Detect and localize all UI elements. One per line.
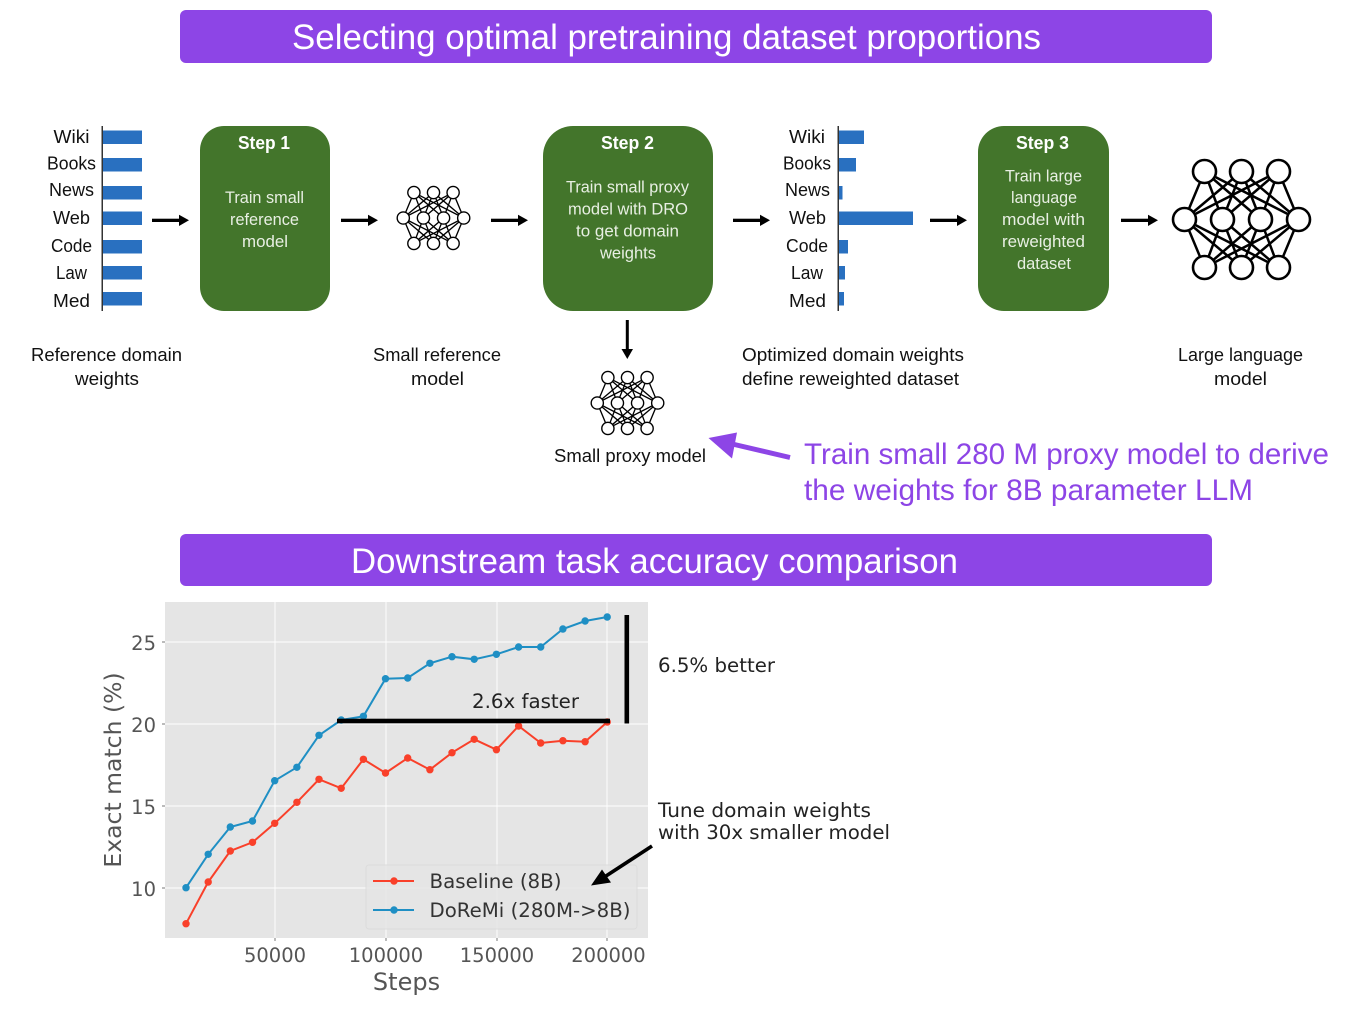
line chart: exact match vs steps [99, 602, 648, 996]
legend [366, 865, 637, 929]
y axis tick labels: 10 [131, 878, 156, 901]
title banner: selecting proportions [180, 10, 1212, 63]
arrow: small reference model to step 2 [491, 215, 528, 226]
panel: optimized domain weights bar chart [783, 126, 913, 311]
panel: step 3: dataset [1017, 255, 1071, 273]
y axis tick labels: 15 [131, 796, 156, 819]
panel: step 2: Step 2 [601, 133, 654, 153]
panel: reference domain weights bar chart [47, 126, 142, 311]
legend: Baseline (8B) [430, 870, 562, 893]
panel: step 2: model with DRO [568, 200, 688, 218]
arrow: purple callout pointer [708, 432, 790, 458]
panel: reference domain weights bar chart: Code [51, 236, 92, 256]
caption: reference domain weights: Reference domain [31, 345, 182, 365]
arrow: weights to step 1 [152, 215, 189, 226]
caption: small reference model: model [411, 369, 464, 389]
x axis tick labels: 150000 [460, 944, 534, 967]
panel: step 3: reweighted [1002, 233, 1085, 251]
annotation: 6.5% better: 6.5% better [658, 654, 776, 677]
panel: step 2: weights [599, 244, 656, 262]
panel: step 1: Step 1 [238, 133, 290, 153]
annotation: 2.6x faster: 2.6x faster [472, 690, 580, 713]
caption: large language model [1178, 345, 1303, 389]
annotation: 6.5% better [624, 615, 776, 724]
panel: step 2: to get domain [576, 222, 679, 240]
panel: reference domain weights bar chart: Books [47, 154, 96, 174]
panel: reference domain weights bar chart: Wiki [54, 127, 90, 147]
title banner: downstream accuracy: Downstream task accuracy comparison [351, 542, 958, 581]
panel: step 2 [543, 126, 713, 311]
callout: purple proxy explanation [804, 438, 1329, 507]
x axis tick labels [244, 944, 646, 967]
annotation: tune domain weights: Tune domain weights [657, 799, 871, 822]
x axis tick labels: 100000 [349, 944, 423, 967]
y axis tick labels [131, 632, 156, 901]
callout: purple proxy explanation: Train small 280 M proxy model to derive [804, 438, 1329, 471]
panel: step 3 [978, 126, 1109, 311]
series: Baseline [182, 718, 611, 927]
panel: optimized domain weights bar chart: Law [791, 263, 824, 283]
caption: large language model: Large language [1178, 345, 1303, 365]
caption: optimized domain weights: define reweighted dataset [742, 369, 959, 389]
caption: large language model: model [1214, 369, 1267, 389]
arrow: optimized weights to step 3 [930, 215, 967, 226]
title banner: selecting proportions: Selecting optimal pretraining dataset proportions [292, 18, 1041, 57]
arrow: step 3 to large model [1121, 215, 1158, 226]
arrow: step 1 to small reference model [341, 215, 378, 226]
panel: optimized domain weights bar chart: Med [789, 291, 826, 311]
caption: optimized domain weights [742, 345, 964, 389]
caption: optimized domain weights: Optimized domain weights [742, 345, 964, 365]
panel: optimized domain weights bar chart: Books [783, 154, 831, 174]
panel: optimized domain weights bar chart: Wiki [789, 127, 825, 147]
caption: small proxy model: Small proxy model [554, 446, 706, 466]
x axis tick labels: 200000 [571, 944, 646, 967]
panel: reference domain weights bar chart: Law [56, 263, 88, 283]
arrow: step 2 to optimized weights [733, 215, 770, 226]
x axis tick labels: 50000 [244, 944, 306, 967]
caption: small reference model [373, 345, 501, 389]
annotation: tune domain weights: with 30x smaller model [658, 821, 890, 844]
x axis title: Steps [373, 968, 440, 996]
icon: small reference network [397, 186, 470, 250]
title banner: downstream accuracy [180, 534, 1212, 586]
panel: step 3: model with [1002, 211, 1085, 229]
panel: optimized domain weights bar chart: Code [786, 236, 828, 256]
panel: step 1: model [242, 233, 288, 251]
icon: large language model network [1173, 160, 1310, 279]
annotation: 2.6x faster [337, 690, 610, 723]
icon: small proxy network [591, 371, 664, 435]
panel: reference domain weights bar chart: News [49, 180, 94, 200]
legend: DoReMi (280M->8B) [430, 899, 630, 922]
caption: reference domain weights: weights [74, 369, 139, 389]
panel: step 3: Step 3 [1016, 133, 1069, 153]
caption: small reference model: Small reference [373, 345, 501, 365]
y axis tick labels: 20 [131, 714, 156, 737]
panel: step 3: language [1011, 189, 1077, 207]
panel: step 1: Train small [225, 189, 304, 207]
panel: step 2: Train small proxy [566, 178, 690, 196]
caption: reference domain weights [31, 345, 182, 389]
panel: optimized domain weights bar chart: Web [789, 208, 826, 228]
series: DoReMi [182, 613, 611, 891]
panel: step 1: reference [230, 211, 299, 229]
panel: step 3: Train large [1005, 168, 1082, 186]
annotation: tune domain weights [591, 799, 890, 886]
panel: optimized domain weights bar chart: News [785, 180, 830, 200]
panel: reference domain weights bar chart: Med [53, 291, 90, 311]
panel: step 1 [200, 126, 330, 311]
callout: purple proxy explanation: the weights for 8B parameter LLM [804, 474, 1253, 507]
y axis tick labels: 25 [131, 632, 156, 655]
arrow: step 2 down to proxy model [622, 320, 633, 359]
panel: reference domain weights bar chart: Web [53, 208, 90, 228]
y axis title: Exact match (%) [99, 672, 127, 868]
